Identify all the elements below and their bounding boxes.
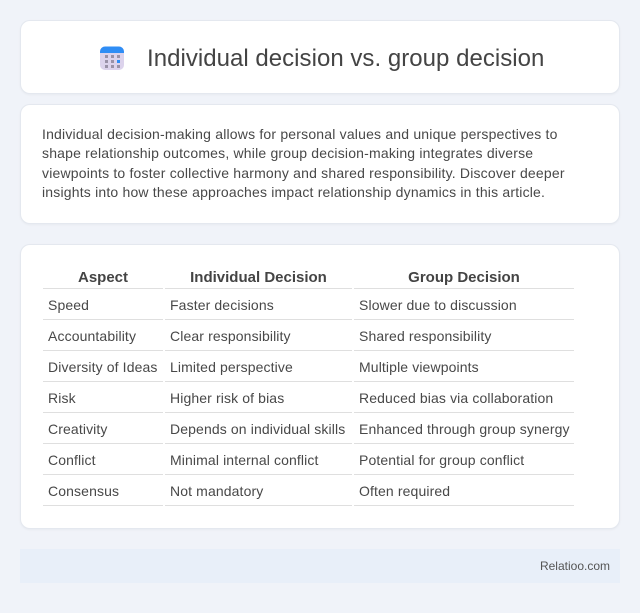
row: conflict <box>48 452 524 468</box>
row: accountability: Clear responsibility <box>170 328 291 344</box>
row: risk <box>48 390 553 406</box>
intro text: shape relationship outcomes, while group decision-making integrates diverse <box>42 145 533 161</box>
row: consensus: Consensus <box>48 483 119 499</box>
footer credit: Relatioo.com <box>540 559 610 573</box>
row: risk: Risk <box>48 390 76 406</box>
row: diversity of ideas: Multiple viewpoints <box>359 359 479 375</box>
row: diversity of ideas: Limited perspective <box>170 359 293 375</box>
row: diversity of ideas: Diversity of Ideas <box>48 359 158 375</box>
row: diversity of ideas <box>48 359 479 375</box>
row: consensus <box>48 483 450 499</box>
row: conflict: Minimal internal conflict <box>170 452 318 468</box>
intro text <box>42 126 565 200</box>
comparison table <box>43 269 574 506</box>
row: creativity: Enhanced through group synergy <box>359 421 570 437</box>
row: speed: Slower due to discussion <box>359 297 517 313</box>
column heading: aspect: Aspect <box>78 269 128 286</box>
intro panel <box>20 104 620 224</box>
intro text: insights into how these approaches impact relationship dynamics in this article. <box>42 184 545 200</box>
row: risk: Higher risk of bias <box>170 390 284 406</box>
title: Individual decision vs. group decision <box>147 45 544 72</box>
row: consensus: Often required <box>359 483 450 499</box>
row: accountability: Shared responsibility <box>359 328 491 344</box>
row: speed: Faster decisions <box>170 297 274 313</box>
row: conflict: Conflict <box>48 452 96 468</box>
column heading: group decision: Group Decision <box>408 269 520 286</box>
row: speed <box>48 297 517 313</box>
row: conflict: Potential for group conflict <box>359 452 524 468</box>
header panel <box>20 20 620 94</box>
icon: calendar <box>100 46 124 70</box>
row: accountability: Accountability <box>48 328 136 344</box>
row: risk: Reduced bias via collaboration <box>359 390 553 406</box>
row: creativity <box>48 421 570 437</box>
intro text: viewpoints to foster collective harmony and shared responsibility. Discover deeper <box>42 165 565 181</box>
row: speed: Speed <box>48 297 89 313</box>
row: accountability <box>48 328 492 344</box>
footer bar <box>20 549 620 583</box>
row: creativity: Creativity <box>48 421 108 437</box>
row: creativity: Depends on individual skills <box>170 421 345 437</box>
column heading: individual decision: Individual Decision <box>190 269 327 286</box>
intro text: Individual decision-making allows for personal values and unique perspectives to <box>42 126 558 142</box>
row: consensus: Not mandatory <box>170 483 263 499</box>
table panel <box>20 244 620 529</box>
